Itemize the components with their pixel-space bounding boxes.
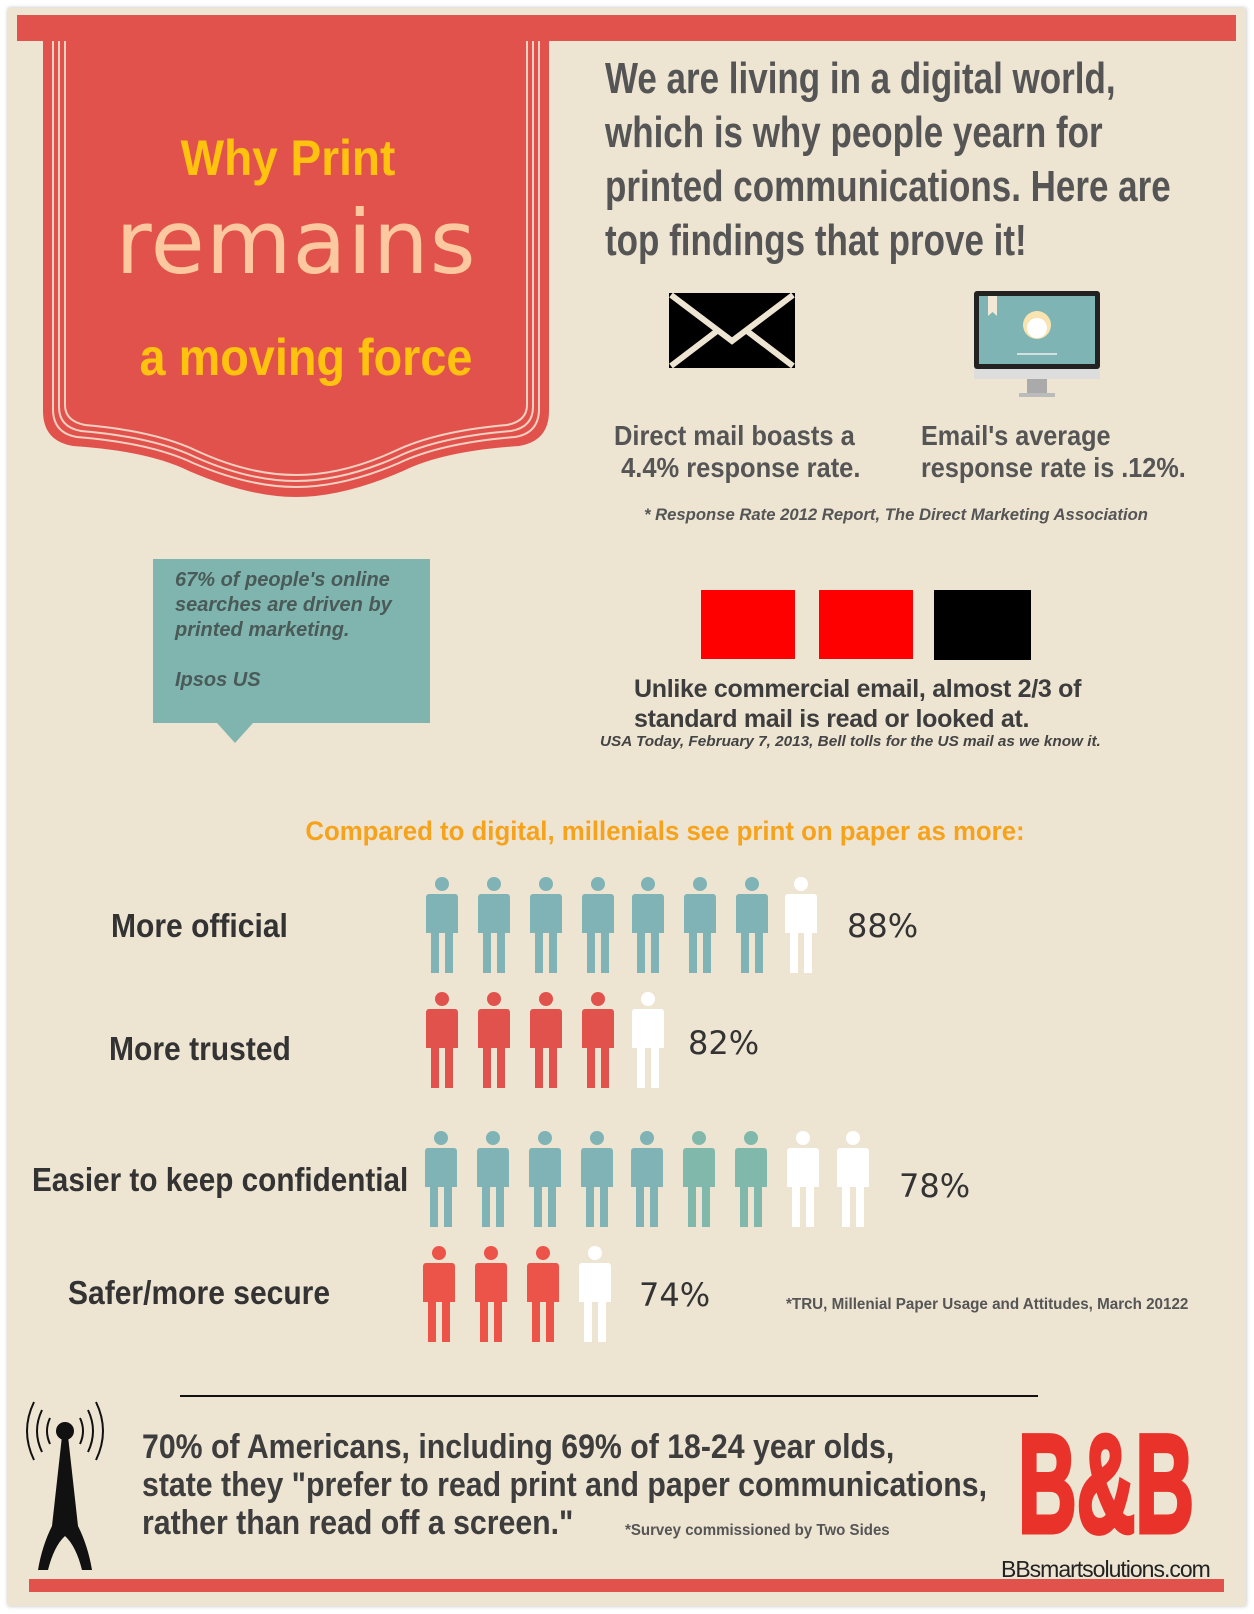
bottom quote: 70% of Americans, including 69% of 18-24 year olds, <box>142 1428 894 1466</box>
footnote TRU: *TRU, Millenial Paper Usage and Attitudes, March 20122 <box>786 1296 1188 1313</box>
source USA Today: USA Today, February 7, 2013, Bell tolls for the US mail as we know it. <box>600 733 1101 750</box>
headline text: We are living in a digital world, <box>605 54 1116 103</box>
icon: radio tower <box>26 1402 104 1570</box>
row: more trusted: More trusted <box>109 1030 291 1067</box>
text: direct mail: 4.4% response rate. <box>621 452 860 483</box>
icon: monitor <box>974 291 1100 397</box>
row: more trusted: 82% <box>688 1024 759 1062</box>
text: standard mail: Unlike commercial email, almost 2/3 of <box>634 675 1081 703</box>
row: confidential <box>32 1131 970 1227</box>
website: BBsmartsolutions.com <box>1001 1556 1210 1582</box>
bottom quote <box>142 1428 987 1542</box>
callout: 67%: Ipsos US <box>175 669 261 691</box>
squares graphic <box>701 590 1031 660</box>
text: standard mail: standard mail is read or looked at. <box>634 705 1029 733</box>
top red bar <box>17 15 1236 41</box>
headline text: top findings that prove it! <box>605 216 1027 265</box>
bottom red bar <box>29 1579 1224 1592</box>
row: more trusted <box>109 992 759 1088</box>
text: standard mail <box>634 675 1082 733</box>
row: safer <box>68 1246 710 1342</box>
headline text <box>604 54 1171 265</box>
text: direct mail <box>614 420 860 483</box>
title text: remains <box>115 191 477 294</box>
title text <box>115 130 477 387</box>
callout: 67%: searches are driven by <box>175 594 392 616</box>
callout: 67% <box>153 559 430 743</box>
row: more official: More official <box>111 907 288 944</box>
text: email: response rate is .12%. <box>921 452 1186 483</box>
bottom quote: rather than read off a screen." <box>142 1504 573 1542</box>
banner <box>43 41 549 497</box>
row: safer: Safer/more secure <box>68 1274 330 1311</box>
row: safer: 74% <box>639 1276 710 1314</box>
row: confidential: Easier to keep confidential <box>32 1161 408 1198</box>
callout: 67%: 67% of people's online <box>175 569 390 591</box>
text: direct mail: Direct mail boasts a <box>614 420 855 451</box>
title text: a moving force <box>140 329 472 387</box>
title text: Why Print <box>181 130 395 186</box>
icon: envelope <box>669 293 795 368</box>
callout: 67%: printed marketing. <box>175 619 349 641</box>
footnote DMA: * Response Rate 2012 Report, The Direct Marketing Association <box>644 505 1148 524</box>
heading: millenials: Compared to digital, millenials see print on paper as more: <box>305 816 1025 846</box>
headline text: which is why people yearn for <box>605 108 1103 157</box>
row: more official: 88% <box>847 907 918 945</box>
row: more official <box>111 877 918 973</box>
bottom quote: state they "prefer to read print and paper communications, <box>142 1466 987 1504</box>
text: email: Email's average <box>921 420 1111 451</box>
headline text: printed communications. Here are <box>605 162 1171 211</box>
text: email <box>921 420 1186 483</box>
footnote two sides: *Survey commissioned by Two Sides <box>625 1522 890 1539</box>
row: confidential: 78% <box>899 1167 970 1205</box>
